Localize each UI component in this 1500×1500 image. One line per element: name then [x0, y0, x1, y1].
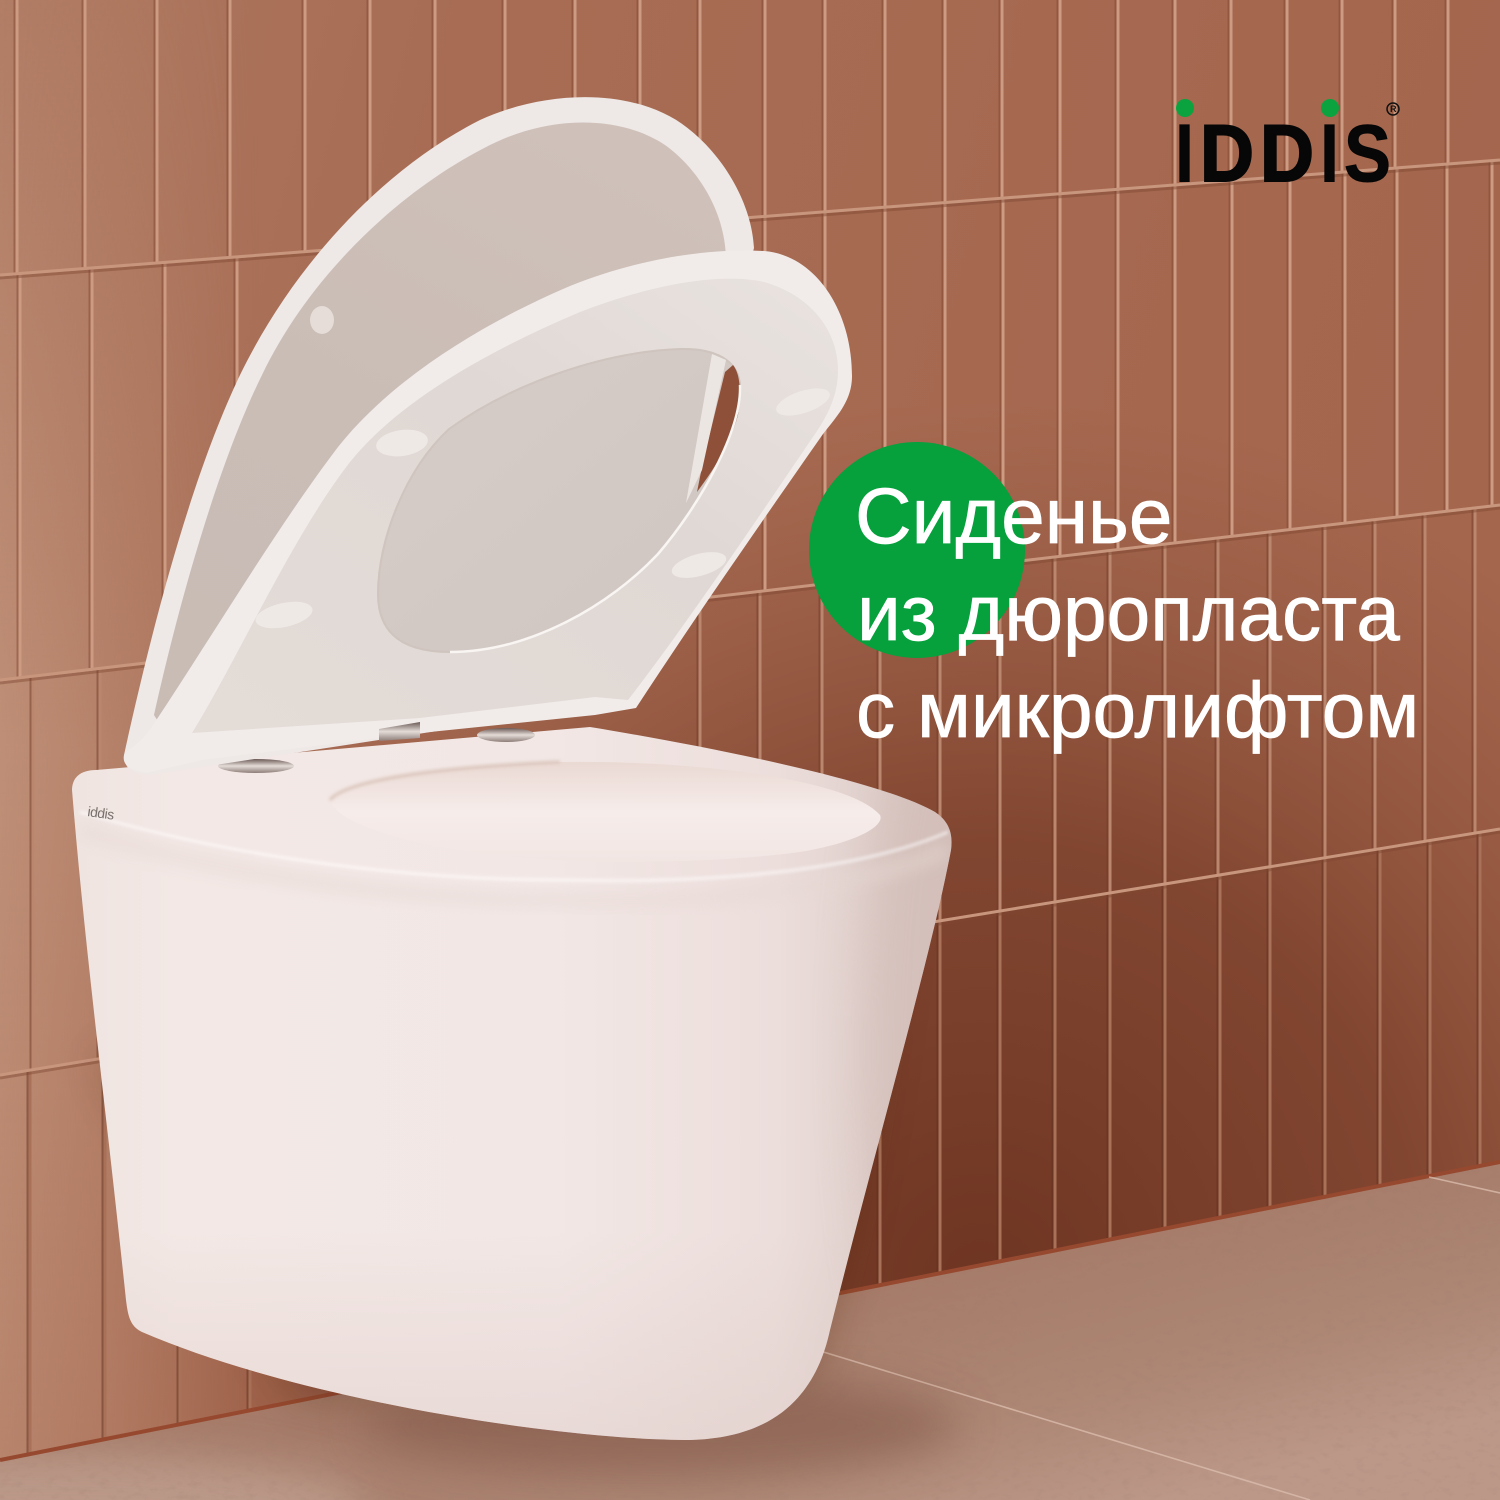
toilet bowl	[72, 727, 952, 1440]
seat bumper upper	[374, 427, 430, 459]
green circle accent	[809, 442, 1025, 658]
bowl opening	[330, 762, 881, 862]
logo: I	[1176, 109, 1193, 199]
heading	[855, 472, 1419, 754]
rim front highlight	[80, 812, 948, 881]
logo: D	[1260, 109, 1314, 199]
chrome button	[379, 722, 420, 741]
toilet seat raised	[124, 250, 852, 773]
heading: Сиденье	[855, 472, 1172, 560]
seat hole: lower highlight	[450, 385, 740, 652]
heading: с микролифтом	[856, 666, 1419, 754]
seat hole: wall seen through	[697, 365, 740, 492]
logo: D	[1200, 109, 1254, 199]
chrome hinge left	[218, 759, 294, 773]
seat bumper lower right	[669, 547, 729, 583]
seat bumper lower left	[253, 597, 315, 633]
logo	[1176, 99, 1399, 199]
toilet lid raised	[124, 97, 754, 775]
engraved logo on bowl: iddis	[87, 803, 115, 823]
seat hole: lid seen through	[378, 349, 740, 652]
seat inner surface	[192, 279, 838, 733]
rim under-shade	[906, 852, 940, 868]
seat bumper right	[773, 383, 833, 421]
logo: I	[1321, 109, 1338, 199]
lid bumper	[310, 306, 334, 334]
chrome hinge right	[477, 728, 535, 742]
logo: S	[1344, 109, 1391, 199]
seat hole: lid edge band	[686, 354, 726, 503]
floor shadow under toilet	[360, 1375, 960, 1475]
bowl opening rim	[330, 762, 560, 800]
floor	[0, 1150, 1500, 1500]
wall shadow behind toilet	[100, 860, 900, 1400]
heading: из дюропласта	[857, 569, 1400, 657]
logo: R	[1390, 104, 1397, 114]
